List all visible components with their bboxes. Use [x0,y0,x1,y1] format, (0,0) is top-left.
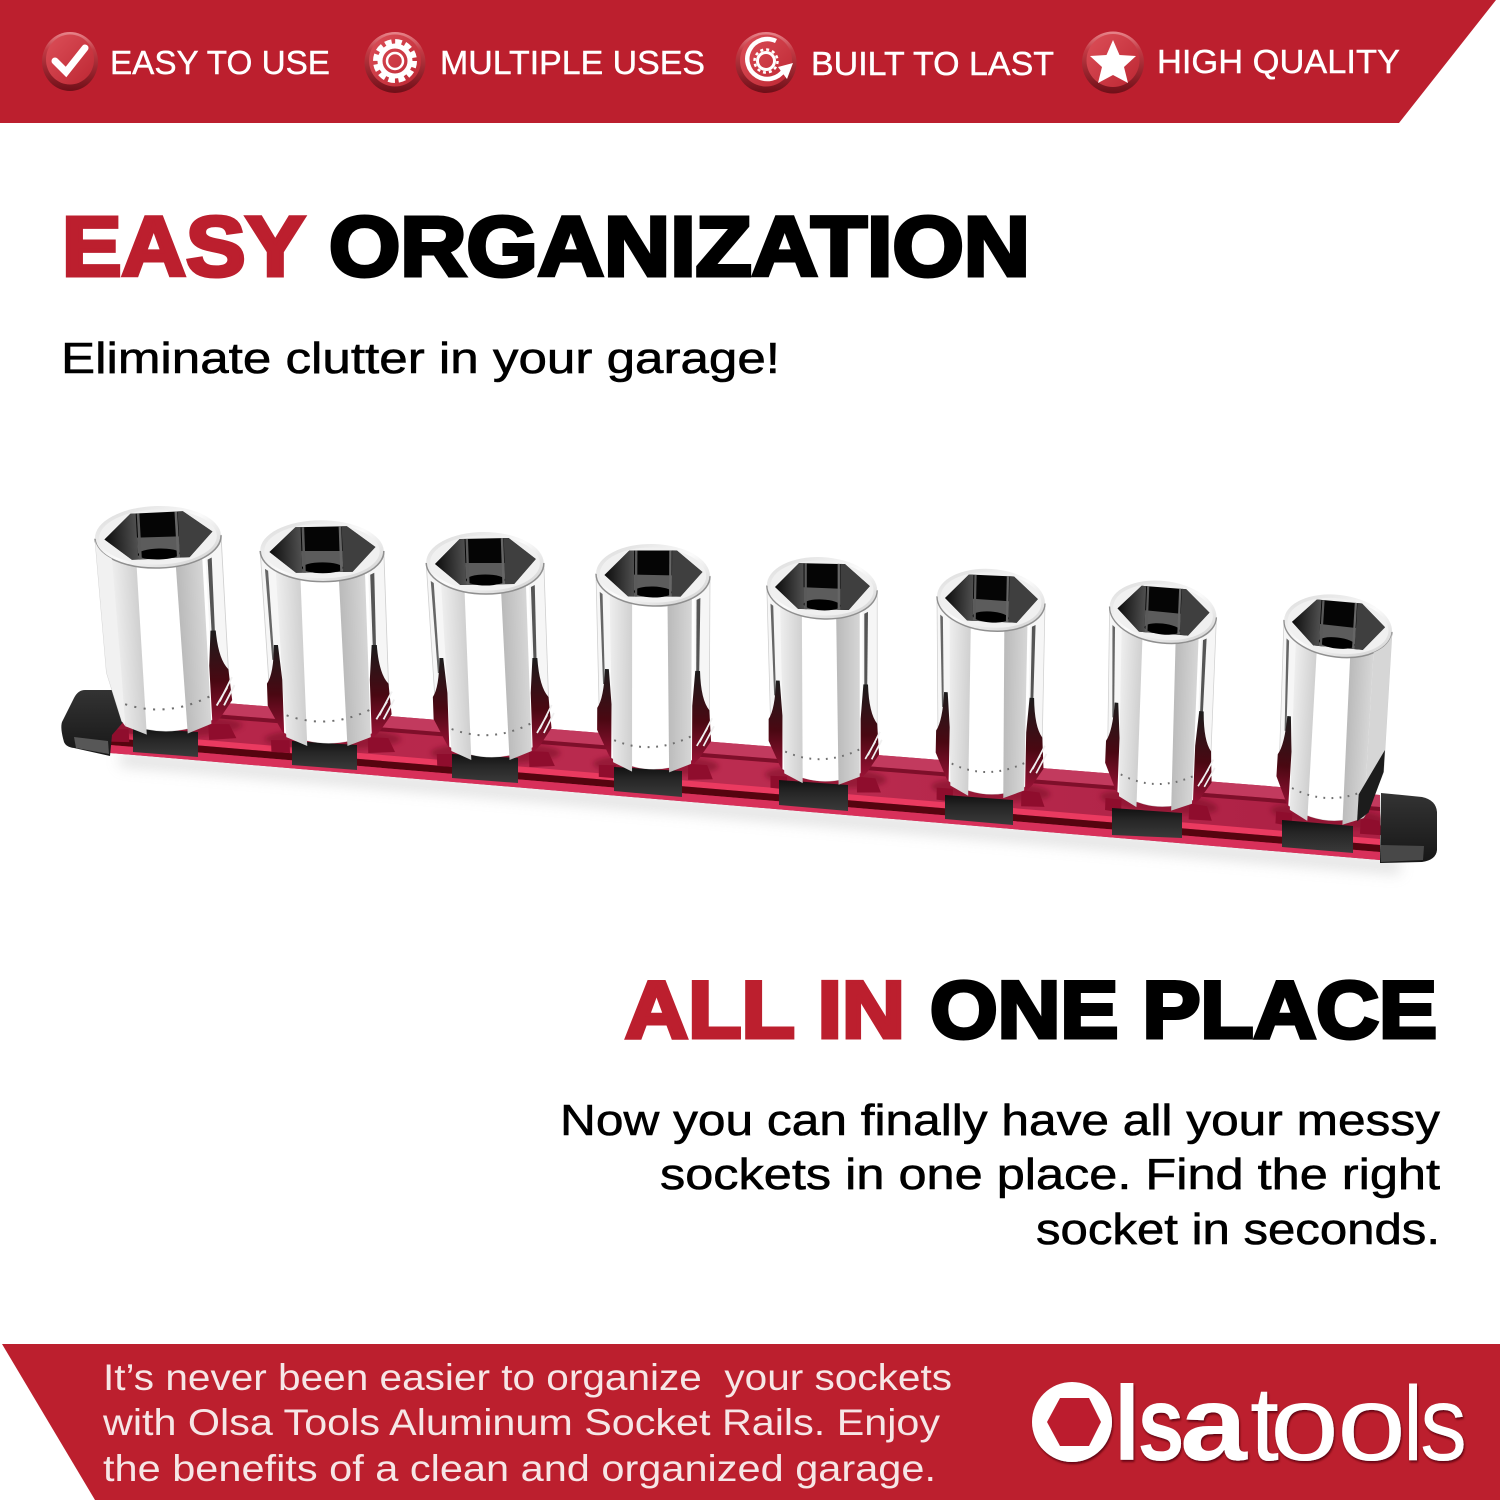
socket 4 [595,543,715,797]
logo: Olsatools: a [1180,1365,1248,1483]
heading: all in one place [625,966,1437,1056]
socket 8 [1272,589,1394,853]
icon: cycle badge [736,32,796,93]
socket 5 [767,555,882,811]
label: high quality: HIGH QUALITY [1157,43,1400,80]
icon: star badge [1082,32,1144,94]
logo: Olsatools [1032,1362,1467,1483]
logo: Olsatools: t [1250,1365,1279,1483]
right end cap [1380,793,1437,863]
footer banner [2,1344,1500,1500]
footer text [102,1357,952,1489]
left end cap [61,690,125,756]
heading: all in one place: ONE PLACE [930,966,1437,1056]
socket 3 [425,532,556,783]
heading: easy organization [62,200,1030,294]
footer text: with Olsa Tools Aluminum Socket Rails. Enjoy [102,1402,941,1443]
socket 6 [933,565,1050,825]
logo: Olsatools: O [1034,1362,1110,1483]
heading: all in one place: ALL IN [625,966,905,1056]
aluminum rail [103,694,1390,860]
socket 1 [93,504,237,757]
logo: Olsatools: o [1337,1365,1406,1483]
subheading: eliminate clutter: Eliminate clutter in your garage! [61,334,780,383]
logo: Olsatools: o [1270,1365,1339,1483]
socket 7 [1102,576,1222,838]
logo: Olsatools: s [1420,1365,1467,1483]
label: multiple uses: MULTIPLE USES [440,44,705,81]
label: built to last: BUILT TO LAST [811,45,1054,82]
body text: sockets in one place [560,1096,1440,1254]
logo: Olsatools: s [1138,1365,1184,1483]
top banner [0,0,1496,123]
footer text: It’s never been easier to organize your sockets [103,1357,952,1398]
heading: easy organization: ORGANIZATION [329,200,1030,294]
footer text: the benefits of a clean and organized garage. [103,1448,936,1489]
logo: Olsatools: l [1403,1365,1423,1483]
body text: sockets in one place: sockets in one place. Find the right [660,1150,1440,1199]
icon: check badge [42,32,98,91]
label: easy to use: EASY TO USE [110,44,330,81]
rail shadow [120,752,1400,874]
heading: easy organization: EASY [62,200,305,294]
socket 2 [259,520,396,770]
icon: gear badge [364,32,426,93]
product: socket rail with eight sockets [61,504,1437,874]
body text: sockets in one place: Now you can finally have all your messy [560,1096,1440,1145]
logo: Olsatools: l [1114,1365,1140,1483]
body text: sockets in one place: socket in seconds. [1036,1205,1440,1254]
